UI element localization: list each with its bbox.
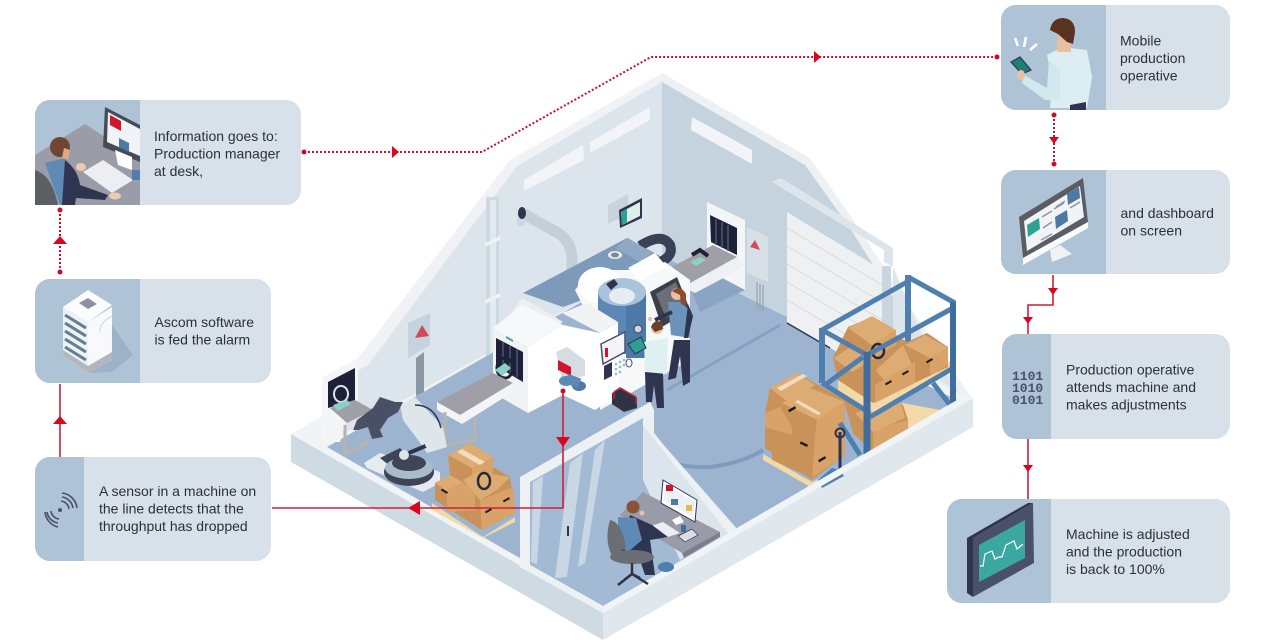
text: mobile operative: production — [1120, 50, 1185, 66]
icon: dashboard monitor — [1019, 178, 1088, 265]
white machine block — [562, 303, 618, 410]
glass wall frame — [520, 402, 738, 613]
man operator with tablet — [628, 321, 668, 408]
text: production operative — [1066, 362, 1196, 412]
connector: production operative to machine — [1023, 439, 1033, 499]
icon: manager at desk — [35, 107, 140, 205]
text: manager: Information goes to: — [154, 128, 278, 144]
text: manager: Production manager — [154, 146, 280, 162]
text: machine adjusted: and the production — [1066, 544, 1182, 560]
text: sensor — [99, 483, 256, 534]
connector: dashboard to production operative — [1023, 275, 1058, 334]
black belt — [640, 239, 671, 262]
cardboard box stack, front left — [432, 443, 515, 538]
right machine frame and conveyor — [670, 202, 745, 293]
panel: mobile production operative — [1001, 5, 1230, 110]
text: mobile operative: operative — [1120, 68, 1178, 84]
connector: sensor to Ascom software — [53, 384, 67, 457]
icon: machine display with trace — [967, 503, 1034, 597]
text: manager: at desk, — [154, 163, 203, 179]
panel: production manager — [35, 100, 301, 205]
office floor and glass — [530, 418, 730, 606]
left wall — [322, 73, 662, 442]
red and black toolbox — [612, 388, 637, 412]
robot arm — [353, 397, 447, 453]
text: Ascom — [154, 314, 254, 348]
left end machine frame — [322, 358, 373, 455]
left enclosure — [493, 298, 563, 413]
building base — [291, 220, 973, 640]
text: machine adjusted — [1066, 526, 1190, 577]
cardboard box stack, right pallet — [763, 373, 845, 488]
icon: binary digits: 0101 — [1012, 393, 1043, 408]
wall pipe — [517, 207, 572, 278]
icon: person with phone — [1011, 18, 1092, 110]
text: sensor: A sensor in a machine on — [99, 483, 256, 499]
left conveyor — [437, 363, 513, 445]
pallet jack — [818, 428, 844, 488]
control panel — [601, 332, 632, 380]
waste bin — [658, 562, 674, 572]
panel: production operative — [1002, 334, 1230, 439]
wall panel near right machine — [747, 227, 768, 311]
woman operator — [648, 288, 693, 386]
floor — [327, 238, 957, 604]
text: production operative: makes adjustments — [1066, 396, 1187, 412]
text: production operative: attends machine and — [1066, 379, 1196, 395]
right wall — [662, 73, 973, 400]
connector: manager to mobile operative, dotted — [302, 51, 1000, 158]
panel: dashboard on screen — [1001, 170, 1230, 274]
text: dashboard — [1120, 205, 1214, 238]
storage rack with boxes — [818, 275, 955, 488]
panel: sensor — [35, 457, 271, 561]
tilted machine screen — [650, 277, 690, 327]
boxes on upper shelf — [833, 316, 948, 403]
panel: Ascom software — [35, 279, 271, 383]
text: machine adjusted: Machine is adjusted — [1066, 526, 1190, 542]
text: sensor: throughput has dropped — [99, 518, 248, 534]
low front ledge redraw — [603, 398, 973, 613]
roller door — [772, 178, 893, 378]
desk — [620, 480, 720, 558]
icon: binary digits — [1012, 369, 1043, 408]
text: manager — [154, 128, 280, 179]
sensor unit — [556, 347, 586, 391]
connector: mobile operative to dashboard, dotted — [1049, 112, 1059, 166]
text: mobile operative: Mobile — [1120, 32, 1161, 48]
icon: binary digits: 1101 — [1012, 369, 1043, 384]
text: machine adjusted: is back to 100% — [1066, 561, 1165, 577]
text: production operative: Production operative — [1066, 362, 1195, 378]
text: mobile operative — [1120, 32, 1185, 84]
icon: binary digits: 1010 — [1012, 381, 1043, 396]
robot base — [364, 439, 440, 492]
main machine — [493, 238, 690, 413]
office room — [520, 402, 738, 613]
blue tank — [598, 278, 646, 358]
office chair — [607, 520, 654, 585]
icon: wireless sensor — [45, 493, 77, 527]
connector: Ascom software to manager, dotted — [53, 208, 67, 274]
boxes on lower shelf — [843, 397, 908, 452]
office worker at desk — [618, 500, 668, 575]
panel: machine adjusted — [947, 499, 1230, 603]
text: Ascom: is fed the alarm — [154, 332, 250, 348]
factory building illustration — [291, 73, 973, 640]
wall touch display — [608, 194, 642, 228]
wall conduit — [485, 197, 500, 362]
text: Ascom: Ascom software — [154, 314, 254, 330]
text: dashboard: on screen — [1120, 222, 1182, 238]
text: dashboard: and dashboard — [1120, 205, 1214, 221]
icon: server tower — [63, 290, 133, 373]
connector: sensor to machine, solid line — [272, 388, 570, 515]
electrical box with warning sign — [408, 313, 430, 396]
wall windows — [524, 107, 752, 191]
rack frame — [822, 277, 955, 455]
text: sensor: the line detects that the — [99, 500, 244, 516]
